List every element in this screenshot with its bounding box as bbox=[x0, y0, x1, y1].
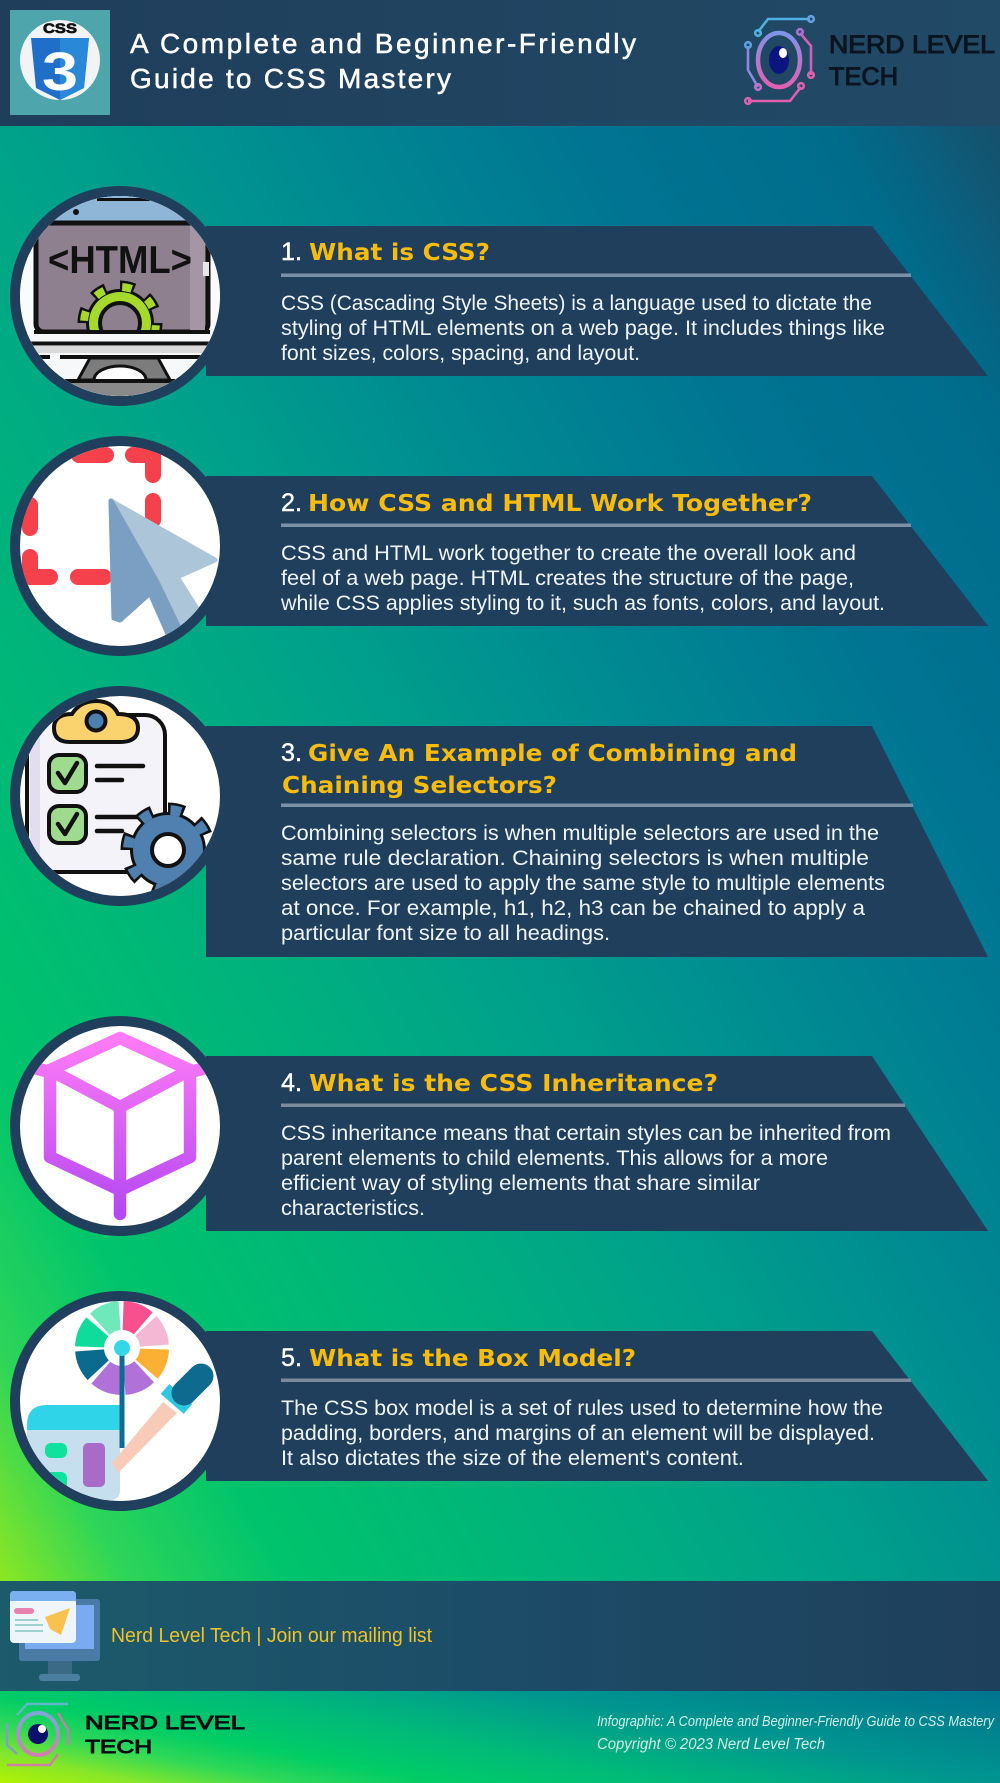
mailing list band bbox=[0, 1581, 1000, 1691]
heading 3 bbox=[281, 739, 797, 799]
body text 1: font sizes, colors, spacing, and layout. bbox=[281, 342, 640, 365]
heading 3: 3. bbox=[281, 739, 302, 767]
title: A Complete and Beginner-Friendly bbox=[130, 28, 636, 59]
body text 2: while CSS applies styling to it, such as fonts, colors, and layout. bbox=[280, 592, 885, 615]
heading 3: Give An Example of Combining and bbox=[308, 739, 797, 767]
footer logo: Nerd Level Tech: NERD LEVEL bbox=[85, 1713, 245, 1733]
title: Guide to CSS Mastery bbox=[130, 63, 451, 94]
heading 1: What is CSS? bbox=[309, 238, 490, 266]
panel: 4 CSS Inheritance bbox=[206, 1056, 988, 1231]
heading 5: What is the Box Model? bbox=[309, 1344, 636, 1372]
icon: monitor with paper plane bbox=[10, 1591, 100, 1681]
body text 4: CSS inheritance means that certain styles can be inherited from bbox=[281, 1122, 891, 1145]
logo: Nerd Level Tech: NERD LEVEL bbox=[829, 31, 995, 59]
heading 2: 2. bbox=[281, 489, 302, 517]
footer logo: Nerd Level Tech bbox=[7, 1704, 245, 1765]
icon circle 4: purple cube bbox=[15, 1021, 225, 1231]
heading 1: 1. bbox=[281, 238, 302, 266]
body text 3: at once. For example, h1, h2, h3 can be chained to apply a bbox=[281, 897, 865, 920]
icon: CSS3 logo bbox=[10, 10, 110, 115]
body text 5: It also dictates the size of the element's content. bbox=[281, 1447, 744, 1470]
icon circle 2: cursor and selection bbox=[15, 441, 225, 651]
body text 2 bbox=[280, 542, 885, 615]
title bbox=[130, 28, 636, 94]
body text 5 bbox=[281, 1397, 883, 1470]
footer caption bbox=[597, 1714, 995, 1753]
body text 5: The CSS box model is a set of rules used to determine how the bbox=[281, 1397, 883, 1420]
body text 5: padding, borders, and margins of an element will be displayed. bbox=[281, 1422, 875, 1445]
heading 5: 5. bbox=[281, 1344, 302, 1372]
icon circle 1: HTML monitor bbox=[10, 190, 230, 404]
body text 3: Combining selectors is when multiple selectors are used in the bbox=[281, 822, 879, 845]
body text 1: styling of HTML elements on a web page. It includes things like bbox=[281, 317, 885, 340]
body text 1: CSS (Cascading Style Sheets) is a language used to dictate the bbox=[281, 292, 872, 315]
body text 3: same rule declaration. Chaining selectors is when multiple bbox=[281, 847, 869, 870]
body text 4: parent elements to child elements. This allows for a more bbox=[281, 1147, 828, 1170]
heading 2: How CSS and HTML Work Together? bbox=[308, 489, 812, 517]
heading 3: Chaining Selectors? bbox=[282, 771, 557, 799]
body text 3: particular font size to all headings. bbox=[281, 922, 610, 945]
body text 4: characteristics. bbox=[281, 1197, 425, 1220]
gear bbox=[127, 809, 209, 891]
body text 3: selectors are used to apply the same style to multiple elements bbox=[281, 872, 885, 895]
body text 1 bbox=[281, 292, 885, 365]
body text 3 bbox=[281, 822, 885, 945]
gear bbox=[78, 280, 162, 330]
body text 2: CSS and HTML work together to create the overall look and bbox=[281, 542, 856, 565]
panel: 5 Box Model bbox=[206, 1331, 988, 1481]
footer bbox=[0, 1691, 1000, 1783]
panel: 3 Combining and Chaining Selectors bbox=[206, 726, 988, 957]
logo: Nerd Level Tech: TECH bbox=[829, 63, 898, 91]
heading 4: What is the CSS Inheritance? bbox=[309, 1069, 718, 1097]
body text 4: efficient way of styling elements that share similar bbox=[281, 1172, 760, 1195]
mailing list text: Nerd Level Tech | Join our mailing list bbox=[111, 1625, 432, 1647]
icon circle 1: HTML monitor: <HTML> bbox=[48, 239, 192, 282]
body text 2: feel of a web page. HTML creates the structure of the page, bbox=[281, 567, 854, 590]
icon circle 3: checklist with gear bbox=[15, 691, 225, 901]
logo: Nerd Level Tech bbox=[745, 16, 995, 104]
footer caption: Copyright © 2023 Nerd Level Tech bbox=[597, 1736, 825, 1753]
footer logo: Nerd Level Tech: TECH bbox=[85, 1737, 152, 1757]
heading 4: 4. bbox=[281, 1069, 302, 1097]
icon circle 5: colour wheel and dropper bbox=[15, 1296, 225, 1506]
panel: 2 How CSS and HTML Work Together? bbox=[206, 476, 988, 626]
icon: CSS3 logo: CSS bbox=[43, 20, 77, 36]
body text 4 bbox=[281, 1122, 891, 1220]
panel: 1 What is CSS? bbox=[206, 226, 988, 376]
header bar bbox=[0, 0, 1000, 126]
icon: CSS3 logo: 3 bbox=[42, 42, 78, 102]
